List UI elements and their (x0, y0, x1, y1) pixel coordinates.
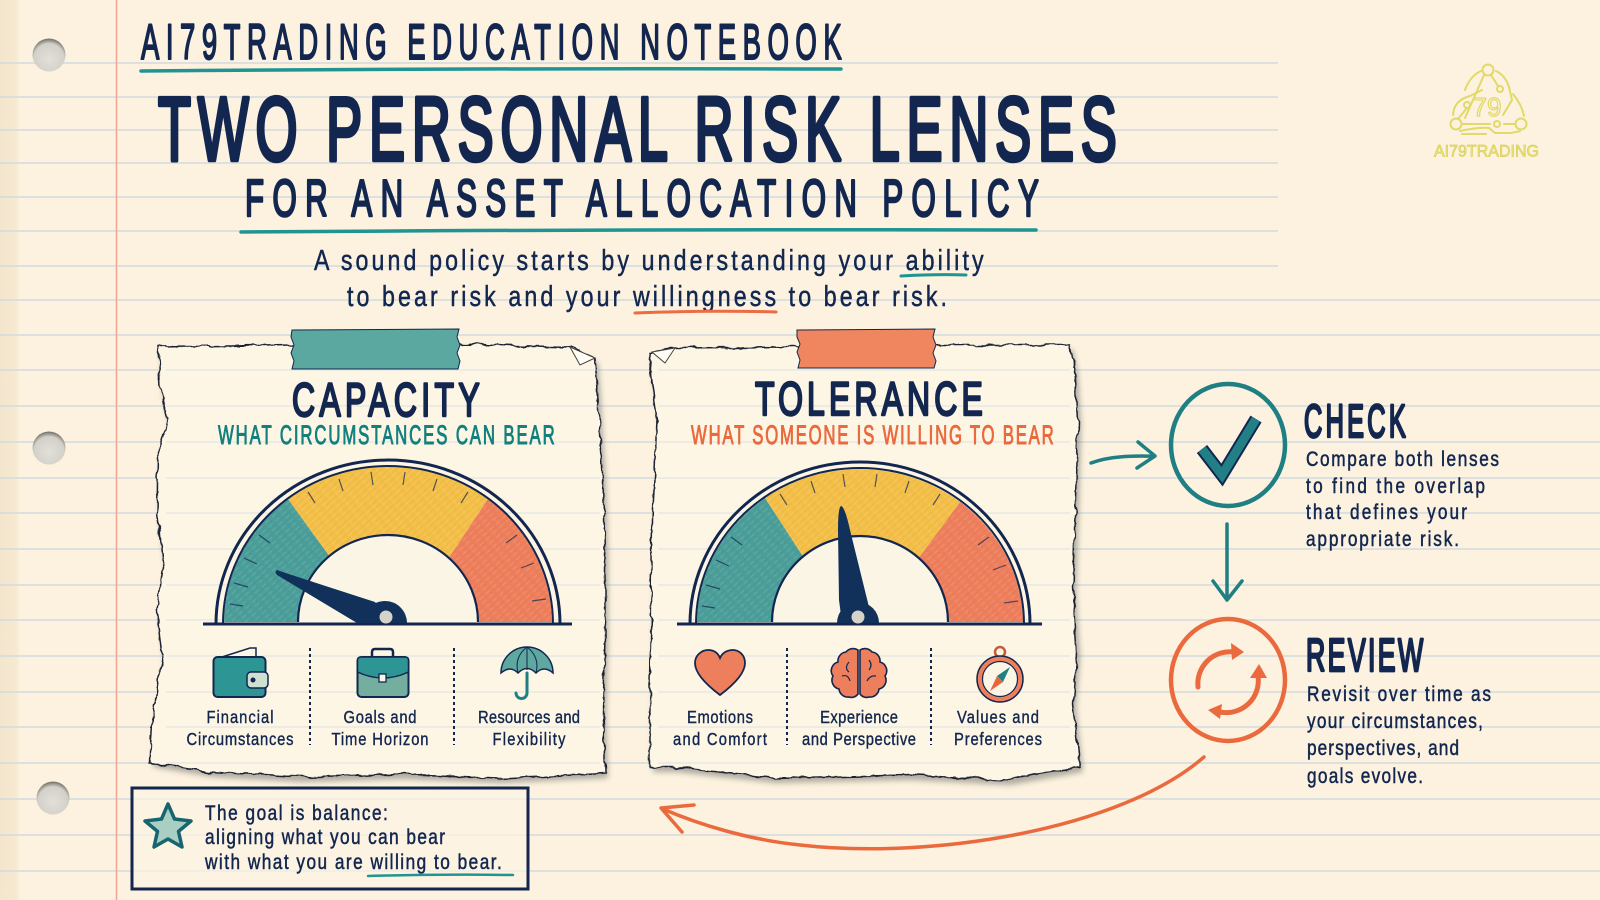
dividers (310, 648, 454, 745)
label: resources and flexibility: Resources and (478, 708, 580, 727)
label: emotions and comfort: Emotions (687, 708, 753, 727)
label: experience and perspective: Experience (820, 708, 898, 727)
label: experience and perspective: and Perspective (802, 730, 916, 749)
label: financial circumstances: Financial (207, 708, 273, 727)
tolerance heading: WHAT SOMEONE IS WILLING TO BEAR (691, 420, 1054, 450)
callout text: with what you are willing to bear. (204, 852, 502, 874)
icon: heart (695, 650, 745, 695)
check text (1304, 395, 1499, 551)
label: resources and flexibility (478, 708, 580, 749)
tape (797, 329, 936, 368)
gauge: capacity (203, 460, 572, 624)
check text: appropriate risk. (1306, 529, 1459, 551)
review text: REVIEW (1306, 629, 1424, 681)
needle (837, 506, 879, 624)
review text: Revisit over time as (1307, 684, 1491, 706)
arrow: check to review (1213, 524, 1242, 600)
binder holes (32, 38, 70, 814)
check text: to find the overlap (1306, 476, 1485, 498)
callout: the goal is balance (132, 788, 528, 889)
corner fold (570, 347, 595, 365)
label: financial circumstances (186, 708, 294, 749)
review text: goals evolve. (1307, 766, 1423, 788)
label: experience and perspective (802, 708, 916, 749)
gauge: tolerance (677, 462, 1042, 624)
review text: perspectives, and (1307, 738, 1459, 760)
label: resources and flexibility: Flexibility (493, 730, 566, 749)
arrow: to check (1091, 442, 1155, 468)
tolerance heading (691, 373, 1054, 450)
check text: Compare both lenses (1306, 449, 1499, 471)
notebook label: AI79TRADING EDUCATION NOTEBOOK (141, 13, 842, 70)
logo: AI79TRADING: 79 (1473, 92, 1501, 122)
intro text: to bear risk and your willingness to bear risk. (347, 279, 947, 313)
label: emotions and comfort: and Comfort (673, 730, 767, 749)
icon: check circle (1171, 384, 1285, 506)
label: values and preferences: Values and (957, 708, 1039, 727)
title (158, 79, 1117, 232)
tape (291, 329, 460, 369)
review text (1306, 629, 1491, 788)
tolerance heading: TOLERANCE (755, 373, 983, 426)
logo: AI79TRADING (1434, 64, 1539, 160)
label: goals and time horizon (331, 708, 429, 749)
check text: CHECK (1304, 395, 1406, 447)
intro text (314, 243, 984, 313)
label: values and preferences (954, 708, 1042, 749)
icon: umbrella (501, 647, 553, 698)
label: values and preferences: Preferences (954, 730, 1042, 749)
label: goals and time horizon: Time Horizon (331, 730, 429, 749)
icon: compass (977, 647, 1023, 702)
label: emotions and comfort (673, 708, 767, 749)
label: financial circumstances: Circumstances (186, 730, 294, 749)
panel: capacity (150, 329, 608, 783)
icon: briefcase (358, 649, 408, 697)
icon: review circle (1171, 619, 1285, 741)
callout text (204, 803, 513, 876)
corner fold (652, 348, 675, 363)
title: FOR AN ASSET ALLOCATION POLICY (245, 170, 1039, 228)
needle (276, 570, 407, 624)
label: goals and time horizon: Goals and (344, 708, 416, 727)
title: TWO PERSONAL RISK LENSES (158, 79, 1117, 179)
icon: brain (831, 649, 887, 697)
logo: AI79TRADING: AI79TRADING (1434, 142, 1539, 160)
icon: wallet (214, 648, 268, 697)
callout text: The goal is balance: (205, 803, 388, 825)
capacity heading: WHAT CIRCUMSTANCES CAN BEAR (218, 420, 555, 450)
dividers (787, 648, 931, 745)
icon: star (145, 804, 191, 847)
check text: that defines your (1306, 502, 1468, 524)
intro text: A sound policy starts by understanding your ability (314, 243, 984, 277)
panel: tolerance (650, 329, 1083, 785)
arrow: review back to lenses (661, 757, 1204, 849)
capacity heading (218, 374, 555, 450)
capacity heading: CAPACITY (292, 374, 480, 427)
callout text: aligning what you can bear (205, 827, 446, 849)
review text: your circumstances, (1307, 711, 1483, 733)
